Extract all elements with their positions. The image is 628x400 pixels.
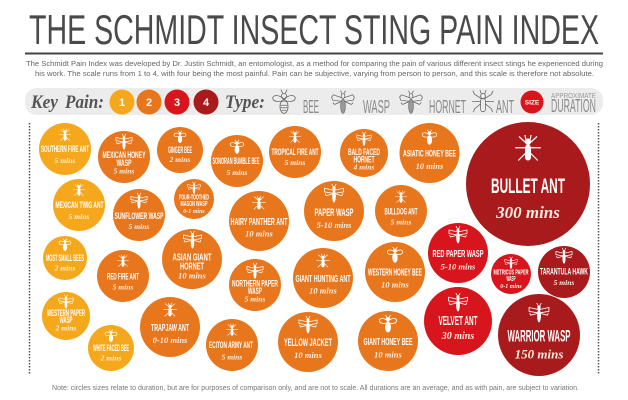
bubble: Bullet Ant: BULLET ANT xyxy=(491,175,565,198)
bubble: Bullet Ant: 300 mins xyxy=(495,203,560,222)
bubble: Mexican Twig Ant xyxy=(53,179,105,231)
key: wasp: WASP xyxy=(363,97,390,117)
bubble: Mexican Honey Wasp xyxy=(98,131,150,183)
intro text xyxy=(26,59,603,78)
bubble: Eciton Army Ant: 5 mins xyxy=(222,352,242,362)
bubble: Sunflower Wasp xyxy=(113,189,165,241)
bubble: Metricus Paper Wasp: WASP xyxy=(506,276,516,283)
bubble: Bullet Ant xyxy=(466,122,590,246)
bubble: Asiatic Honey Bee: 10 mins xyxy=(416,161,444,171)
bubble: Ginger Bee: GINGER BEE xyxy=(168,145,192,155)
text: MOST SMALL BEES xyxy=(46,253,84,263)
bubble: Asian Giant Hornet: 10 mins xyxy=(178,270,207,280)
bubble: Trapjaw Ant: TRAPJAW ANT xyxy=(151,322,189,334)
bubble: Most Small Bees: 2 mins xyxy=(54,264,75,272)
key: pain level 4: 4 xyxy=(203,97,210,109)
bubble: Metricus Paper Wasp: METRICUS PAPER xyxy=(494,270,528,276)
bubble: Giant Honey Bee: 10 mins xyxy=(374,350,403,360)
key: pain level 1 xyxy=(110,90,134,114)
bubble: Sonoran Bumble Bee xyxy=(211,135,263,187)
key: pain label xyxy=(30,92,104,113)
bubble: Giant Hunting Ant xyxy=(293,248,353,308)
text: SONORAN BUMBLE BEE xyxy=(212,156,260,166)
key: pain label: Key xyxy=(30,92,59,113)
bubble: Bald Faced Hornet: BALD FACED xyxy=(348,147,380,157)
key: wasp xyxy=(332,91,390,117)
key: approximate duration: APPROXIMATE xyxy=(551,91,596,100)
bubble: Velvet Ant: VELVET ANT xyxy=(438,313,478,328)
bubble: Giant Honey Bee xyxy=(358,311,418,371)
key: pain label: Pain: xyxy=(64,92,104,113)
bubble: Western Paper Wasp: WASP xyxy=(60,315,72,325)
bubble: Four-Toothed Mason Wasp xyxy=(174,179,214,219)
bubble: Eciton Army Ant: ECITON ARMY ANT xyxy=(209,340,253,350)
key: pain level 2: 2 xyxy=(146,97,152,109)
bubble: Southern Fire Ant: SOUTHERN FIRE ANT xyxy=(41,144,89,154)
bubble: White Faced Bee xyxy=(88,325,134,371)
bubble: Mexican Twig Ant: 5 mins xyxy=(69,212,89,221)
bubble: Western Paper Wasp xyxy=(42,292,90,340)
key: size: SIZE xyxy=(525,100,540,106)
bubble: Bald Faced Hornet: HORNET xyxy=(354,154,375,164)
bubble: Mexican Honey Wasp: MEXICAN HONEY xyxy=(102,150,146,160)
bubble: Mexican Honey Wasp: 5 mins xyxy=(114,166,134,176)
bubble: Bulldog Ant: BULLDOG ANT xyxy=(384,206,418,216)
bubble: Tarantula Hawk: 5 mins xyxy=(554,278,574,287)
bubble: Asiatic Honey Bee: ASIATIC HONEY BEE xyxy=(403,148,456,158)
bubble: Tarantula Hawk: TARANTULA HAWK xyxy=(540,266,588,276)
bubble: Asiatic Honey Bee xyxy=(400,123,460,183)
key panel: BEE xyxy=(303,97,319,117)
bubble: Yellow Jacket: YELLOW JACKET xyxy=(284,337,332,349)
bubble: Northern Paper Wasp: WASP xyxy=(248,286,262,296)
key: approximate duration xyxy=(551,91,596,116)
bubble: Red Paper Wasp: 5-10 mins xyxy=(441,262,476,272)
bubble: Paper Wasp xyxy=(304,181,364,241)
bubble: Asian Giant Hornet: ASIAN GIANT xyxy=(172,252,212,264)
bubble: Red Fire Ant: RED FIRE ANT xyxy=(107,272,139,282)
bubble: Giant Hunting Ant: GIANT HUNTING ANT xyxy=(296,273,351,285)
bubble: Giant Honey Bee: GIANT HONEY BEE xyxy=(364,336,412,348)
text: WHITE FACED BEE xyxy=(93,343,129,353)
bubble: Paper Wasp: 5-10 mins xyxy=(317,220,352,230)
bubble: Yellow Jacket: 10 mins xyxy=(294,350,323,360)
key: pain level 1: 1 xyxy=(119,97,125,109)
bubble: Tropical Fire Ant: TROPICAL FIRE ANT xyxy=(272,147,319,157)
bubble: Southern Fire Ant: 5 mins xyxy=(55,156,75,165)
bubble: Trapjaw Ant xyxy=(140,297,200,357)
bubble: Velvet Ant xyxy=(424,287,492,355)
bubble: Red Paper Wasp xyxy=(428,223,488,283)
key: size xyxy=(520,90,544,114)
bubble: Bulldog Ant: 5 mins xyxy=(391,218,411,226)
key: ant xyxy=(472,90,514,117)
bubble: Hairy Panther Ant: HAIRY PANTHER ANT xyxy=(230,217,288,228)
bubble: Western Honey Bee xyxy=(365,242,425,302)
bubble: Northern Paper Wasp: NORTHERN PAPER xyxy=(232,278,278,288)
bubble: Warrior Wasp xyxy=(498,294,580,376)
bubble: Metricus Paper Wasp: 0-1 mins xyxy=(500,284,522,290)
bubble: Warrior Wasp: 150 mins xyxy=(515,346,563,362)
bubble: Tropical Fire Ant xyxy=(269,126,321,178)
key: pain level 3: 3 xyxy=(174,97,180,109)
bubble: Hairy Panther Ant xyxy=(229,191,289,251)
bubble: Western Honey Bee: 10 mins xyxy=(381,280,410,290)
bubble: Northern Paper Wasp xyxy=(229,259,281,311)
key: ant: ANT xyxy=(496,97,514,117)
bubble: Bulldog Ant xyxy=(375,185,427,237)
bubble: Ginger Bee xyxy=(157,127,203,173)
bubble: Bald Faced Hornet: 4 mins xyxy=(353,162,374,172)
bubble: Western Paper Wasp: 2 mins xyxy=(55,324,76,332)
bubble: Velvet Ant: 30 mins xyxy=(441,331,474,342)
bubble: Southern Fire Ant xyxy=(39,123,91,175)
key panel xyxy=(25,88,603,117)
bubble: Asian Giant Hornet: HORNET xyxy=(180,260,204,272)
footnote: Note: circles sizes relate to duration, but are for purposes of comparison only, and are not to scale. All durations are an average, and as with pain, are subject to variation. xyxy=(52,383,579,392)
bubble: Four-Toothed Mason Wasp: FOUR-TOOTHED xyxy=(179,194,209,202)
bubble: Yellow Jacket xyxy=(278,312,338,372)
bubble: Western Honey Bee: WESTERN HONEY BEE xyxy=(368,268,422,278)
bubble: Western Paper Wasp: WESTERN PAPER xyxy=(47,308,85,318)
bubble: Eciton Army Ant xyxy=(206,319,258,371)
bubble: Northern Paper Wasp: 5 mins xyxy=(245,294,265,304)
intro text: his work. The scale runs from 1 to 4, with four being the most painful. Pain can be subjective, varying from person to person, and this scale is therefore not absolute. xyxy=(35,69,594,78)
bubble: Tropical Fire Ant: 5 mins xyxy=(285,158,305,167)
bubble: White Faced Bee: 2 mins xyxy=(100,354,121,362)
bubble: Four-Toothed Mason Wasp: MASON WASP xyxy=(180,201,208,208)
bubble: Red Paper Wasp: RED PAPER WASP xyxy=(432,248,484,260)
bubble: Metricus Paper Wasp xyxy=(491,254,531,294)
key: type label: Type: xyxy=(225,92,265,113)
intro text: The Schmidt Pain Index was developed by Dr. Justin Schmidt, an entomologist, as a method for comparing the pain of various different insect stings he experienced during xyxy=(26,59,603,68)
bubble: Trapjaw Ant: 0-10 mins xyxy=(153,335,188,345)
key: hornet xyxy=(400,91,466,117)
key: pain level 2 xyxy=(136,90,162,114)
bubble: Four-Toothed Mason Wasp: 0-1 mins xyxy=(183,209,205,215)
bubble: Sonoran Bumble Bee: 5 mins xyxy=(227,168,247,177)
bubble: Asian Giant Hornet xyxy=(162,229,222,289)
bubble: Tarantula Hawk xyxy=(538,246,590,298)
bubble: Red Fire Ant: 5 mins xyxy=(113,282,133,292)
bubble: Mexican Twig Ant: MEXICAN TWIG ANT xyxy=(56,200,104,210)
bubble: Giant Hunting Ant: 10 mins xyxy=(309,286,338,296)
key: pain level 3 xyxy=(164,90,190,114)
key: bee xyxy=(273,90,319,117)
bubble: Red Fire Ant xyxy=(97,250,149,302)
bubble: Mexican Honey Wasp: WASP xyxy=(116,158,132,168)
bubble: Bald Faced Hornet xyxy=(340,129,388,177)
bubble: Sunflower Wasp: 5 mins xyxy=(129,222,149,231)
bubble: Sunflower Wasp: SUNFLOWER WASP xyxy=(114,211,164,221)
bubble: Ginger Bee: 2 mins xyxy=(169,155,190,164)
key panel: HORNET xyxy=(429,97,466,117)
bubble: Hairy Panther Ant: 10 mins xyxy=(245,228,274,238)
bubble: Paper Wasp: PAPER WASP xyxy=(314,207,354,219)
key: pain level 4 xyxy=(194,90,218,114)
bubble: Most Small Bees xyxy=(43,236,87,280)
